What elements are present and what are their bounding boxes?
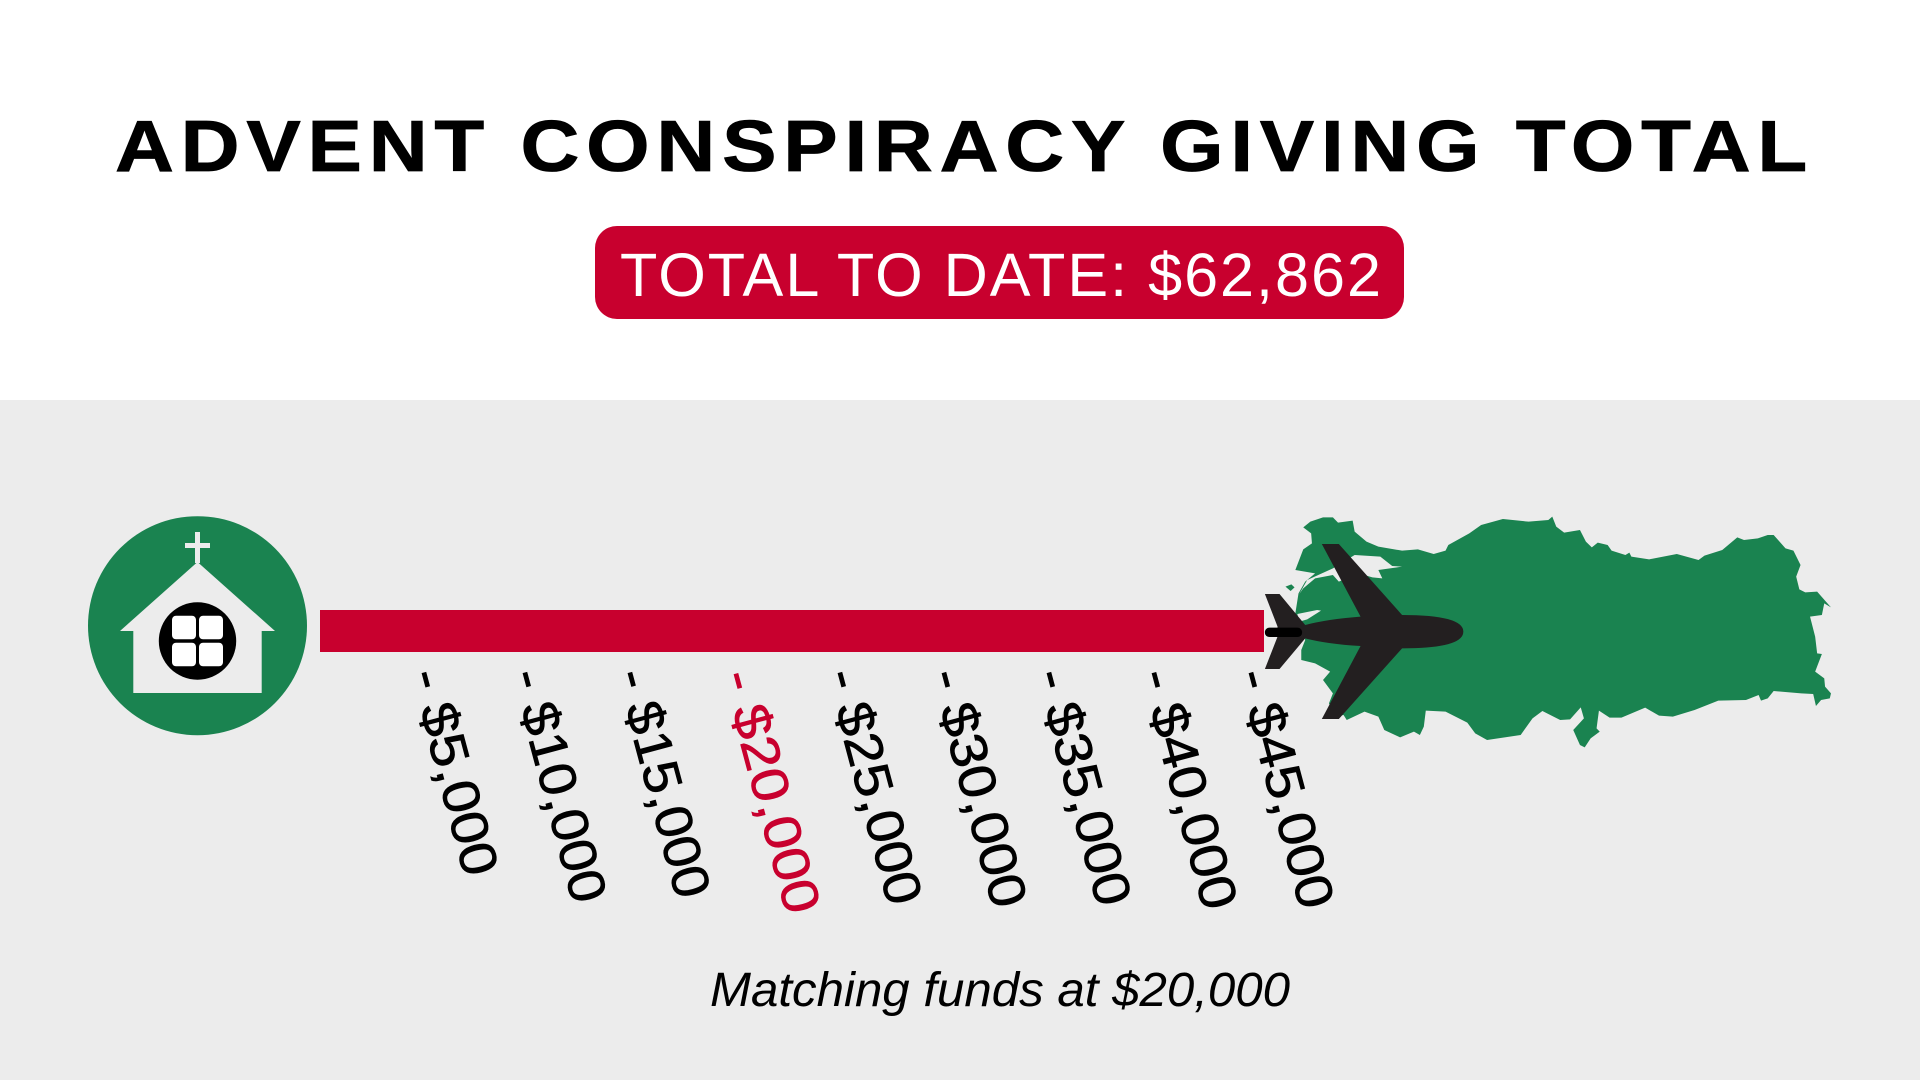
tick: $25,000: - $25,000 <box>814 662 933 911</box>
progress bar <box>320 610 1264 652</box>
total to date badge: TOTAL TO DATE: $62,862 <box>620 241 1383 309</box>
tick: $10,000: - $10,000 <box>499 662 618 909</box>
tick labels <box>398 662 1345 920</box>
title: ADVENT CONSPIRACY GIVING TOTAL <box>115 107 1814 187</box>
panel: progress tracker <box>0 400 1920 1080</box>
tick: $20,000 highlighted: - $20,000 <box>710 663 831 920</box>
tick: $30,000: - $30,000 <box>918 662 1038 914</box>
tick: $35,000: - $35,000 <box>1023 662 1142 912</box>
tick: $40,000: - $40,000 <box>1128 662 1248 916</box>
icon: church in green circle <box>88 516 307 735</box>
icon: airplane <box>1265 544 1463 719</box>
panel: header <box>0 0 1920 400</box>
tick: $15,000: - $15,000 <box>604 662 721 904</box>
matching funds note: Matching funds at $20,000 <box>710 964 1290 1017</box>
total to date badge <box>595 226 1404 319</box>
tick: $45,000: - $45,000 <box>1225 662 1345 915</box>
tick: $5,000: - $5,000 <box>398 662 509 882</box>
map of Turkey <box>1285 517 1831 747</box>
